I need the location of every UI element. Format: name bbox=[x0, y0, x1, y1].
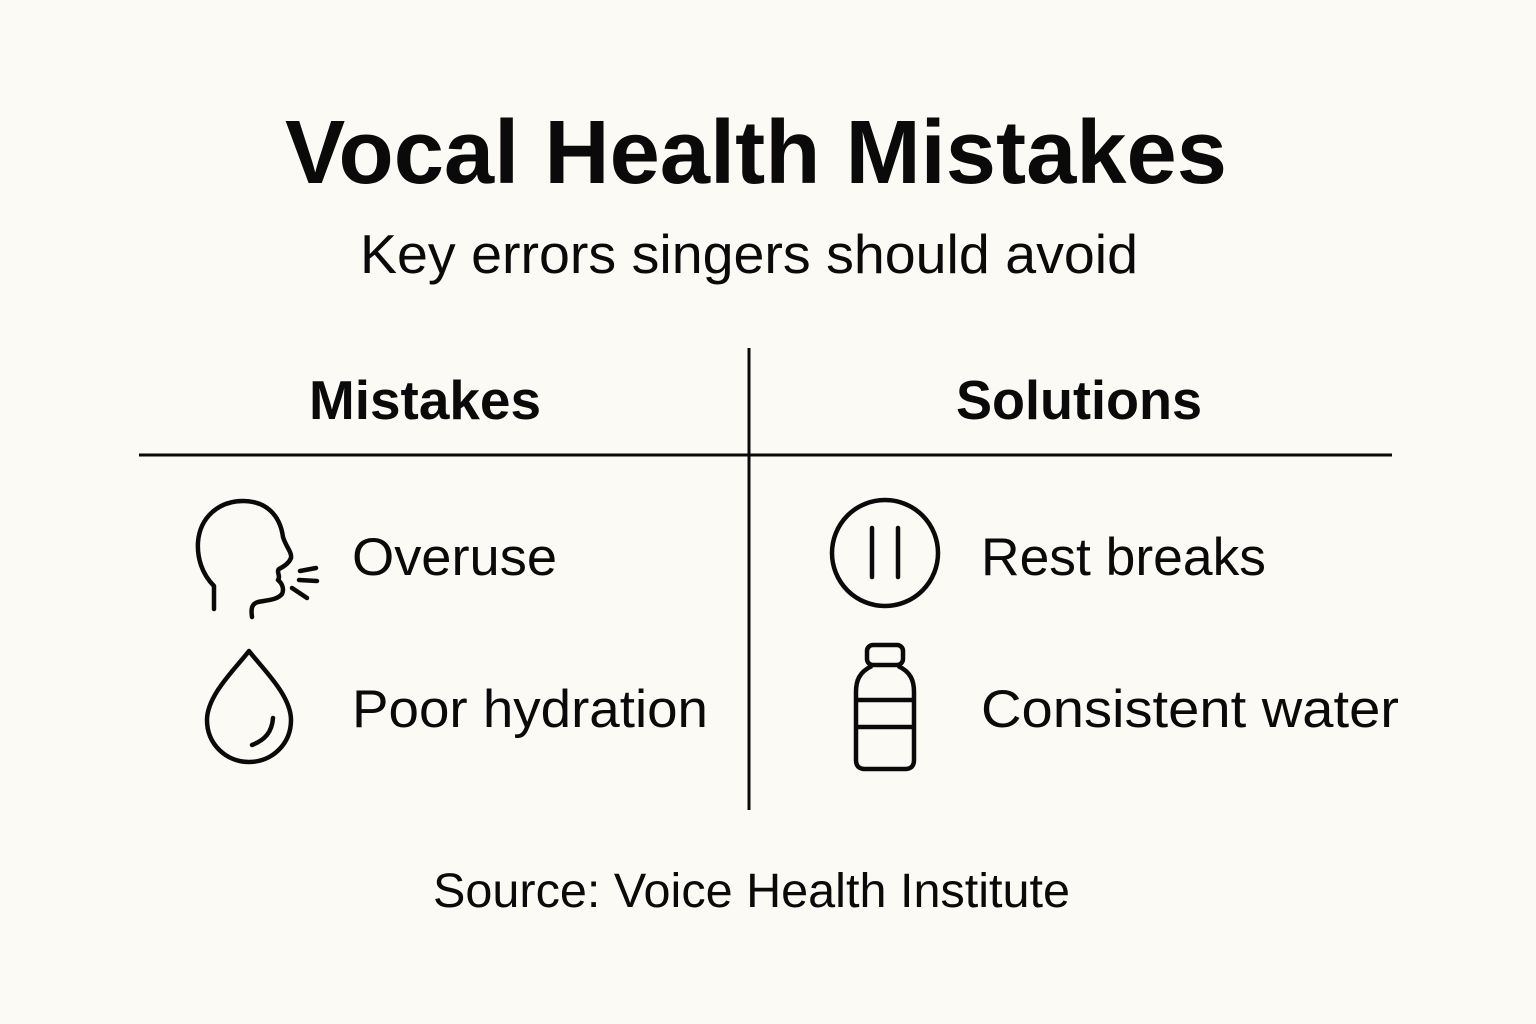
icon: pause circle bbox=[832, 500, 938, 606]
title: Vocal Health Mistakes bbox=[285, 103, 1227, 203]
text: Rest breaks: Rest breaks bbox=[981, 528, 1266, 587]
icon: head speaking bbox=[198, 501, 317, 617]
source: Source: Voice Health Institute bbox=[433, 865, 1070, 918]
subtitle: Key errors singers should avoid bbox=[360, 223, 1138, 285]
icon: water drop bbox=[207, 651, 291, 762]
text: Overuse: Overuse bbox=[352, 528, 557, 587]
heading: Solutions: Solutions bbox=[956, 369, 1202, 431]
heading: Mistakes: Mistakes bbox=[309, 369, 541, 431]
text: Poor hydration: Poor hydration bbox=[352, 680, 708, 739]
icon: water bottle bbox=[856, 645, 914, 769]
text: Consistent water: Consistent water bbox=[981, 680, 1399, 739]
